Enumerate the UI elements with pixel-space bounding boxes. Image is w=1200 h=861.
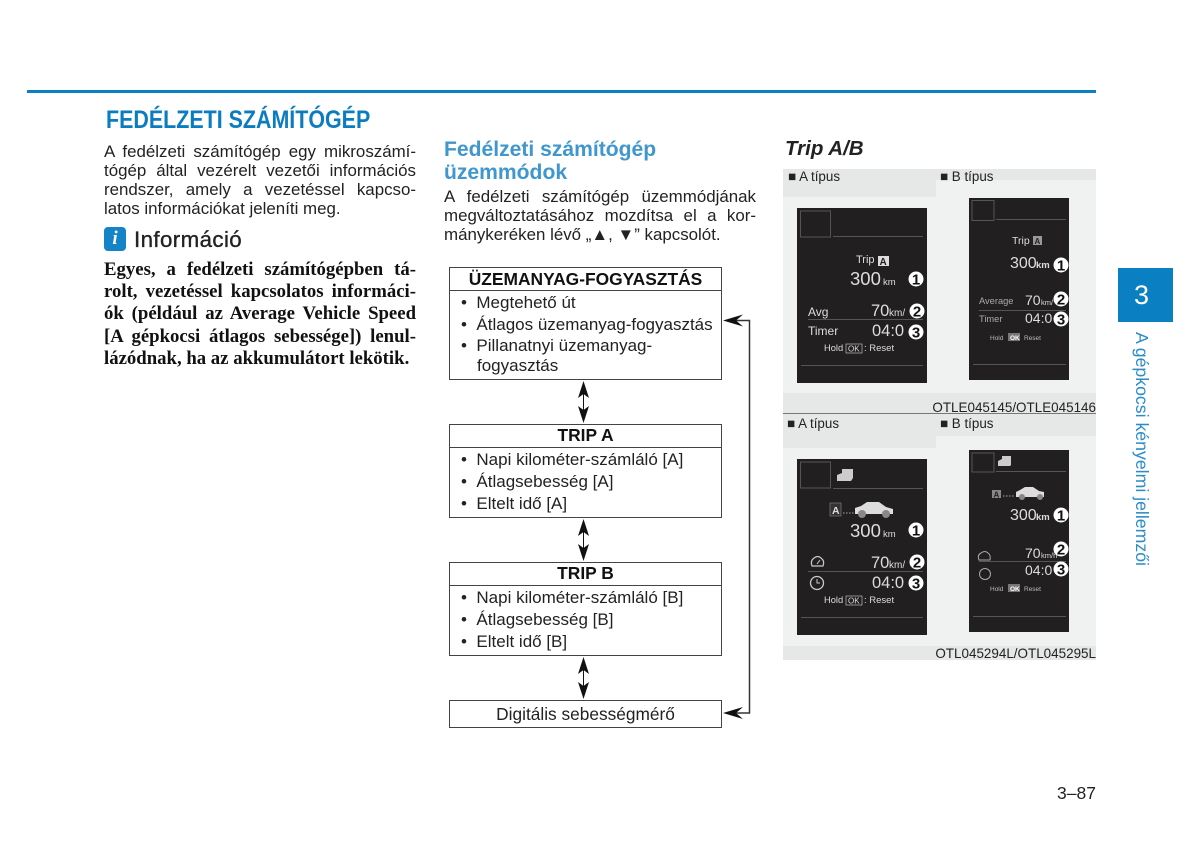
intro text: latos információkat jeleníti meg. — [104, 199, 341, 218]
screen: bottom A: 300 — [850, 520, 881, 541]
screen: bottom A: 3 — [912, 576, 920, 592]
screen: top B: km — [1036, 260, 1050, 271]
modes text — [444, 187, 756, 244]
figure panel top: OTLE045145/OTLE045146 — [932, 400, 1096, 415]
section heading: modes: Fedélzeti számítógép — [444, 138, 656, 161]
chapter tab — [1118, 268, 1173, 322]
screen: top B: Hold — [990, 335, 1004, 342]
box: trip A: TRIP A — [557, 425, 614, 445]
section heading: modes — [444, 138, 656, 184]
title: FEDÉLZETI SZÁMÍTÓGÉP — [106, 106, 370, 134]
icon: info — [104, 227, 126, 251]
screen: bottom A: 70 — [871, 554, 889, 572]
screen: bottom B: Hold — [990, 586, 1004, 593]
figure panel bottom: OTL045294L/OTL045295L — [935, 646, 1097, 661]
box: trip B: TRIP B — [557, 563, 614, 583]
screen: top B: 70 — [1025, 292, 1041, 308]
modes text: megváltoztatásához mozdítsa el a kor- — [444, 206, 756, 225]
figure panel top: ■ A típus — [788, 169, 840, 184]
info text: rolt, vezetéssel kapcsolatos informáci- — [104, 281, 416, 302]
screen: top A: : Reset — [864, 343, 894, 354]
box: fuel consumption — [449, 267, 722, 380]
screen: top A: A — [880, 257, 887, 268]
box: fuel consumption: • Átlagos üzemanyag-fogyasztás — [461, 315, 713, 334]
screen: top A: 3 — [912, 324, 920, 342]
screen: top B: Average — [979, 296, 1013, 306]
box: fuel consumption: • Megtehető út — [461, 293, 576, 312]
figure panel bottom: ■ B típus — [940, 416, 994, 431]
screen: bottom B: 04:0 — [1025, 562, 1052, 578]
box: digital speedometer — [449, 700, 722, 728]
top rule — [27, 90, 1096, 93]
screen: bottom B: 3 — [1057, 562, 1065, 578]
intro text: rendszer, amely a vezetéssel kapcso- — [104, 180, 416, 199]
screen: top B: Timer — [979, 314, 1002, 324]
figure panel top — [783, 169, 1096, 415]
chapter side label: A gépkocsi kényelmi jellemzői — [1132, 332, 1152, 566]
info text: ók (például az Average Vehicle Speed — [104, 303, 416, 324]
box: trip A: • Átlagsebesség [A] — [461, 472, 613, 491]
box: trip A: • Eltelt idő [A] — [461, 494, 567, 513]
box: trip B — [449, 562, 722, 656]
icon: info: i — [112, 228, 118, 249]
box: fuel consumption: • Pillanatnyi üzemanyag- — [461, 336, 652, 355]
screen: top B: km/ — [1041, 298, 1054, 307]
info text: [A gépkocsi átlagos sebessége]) lenul- — [104, 326, 416, 347]
figure panel bottom: ■ A típus — [787, 416, 839, 431]
screen: bottom B: km/h — [1041, 551, 1057, 560]
heading: Trip A/B: Trip A/B — [785, 137, 864, 160]
screen: top A: km/ — [889, 308, 905, 319]
screen: bottom A: Hold — [824, 595, 843, 605]
screen: top A — [797, 208, 927, 383]
arrow: trip A to trip B — [578, 519, 589, 561]
arrow: loop from speedometer to fuel — [723, 314, 750, 719]
intro text — [104, 142, 416, 218]
box: trip A — [449, 424, 722, 518]
intro text: A fedélzeti számítógép egy mikroszámí- — [104, 142, 416, 161]
box: trip B: • Átlagsebesség [B] — [461, 610, 613, 629]
screen: top A: OK — [848, 344, 860, 354]
screen: top A: Timer — [808, 324, 838, 338]
screen: top B: OK — [1010, 335, 1020, 342]
screen: top A: 1 — [912, 272, 920, 288]
info text — [104, 259, 416, 369]
screen: bottom B: A — [994, 490, 1000, 500]
screen: top B: 300 — [1010, 255, 1037, 272]
screen: bottom B: 1 — [1057, 508, 1065, 524]
screen: top A: 04:0 — [872, 322, 904, 340]
screen: top B: 2 — [1057, 292, 1065, 308]
box: fuel consumption: fogyasztás — [477, 356, 558, 375]
figure panel bottom — [783, 414, 1097, 661]
screen: bottom A — [797, 459, 927, 635]
chapter tab: 3 — [1134, 280, 1149, 310]
modes text: A fedélzeti számítógép üzemmódjának — [444, 187, 756, 206]
box: trip B: • Eltelt idő [B] — [461, 632, 567, 651]
intro text: tógép által vezérelt vezetői információs — [104, 161, 416, 180]
screen: top A: km — [883, 277, 896, 288]
screen: top A: Trip — [856, 254, 875, 266]
screen: bottom A: 04:0 — [872, 574, 904, 592]
section heading: modes: üzemmódok — [444, 160, 567, 184]
screen: top A: Avg — [808, 305, 828, 319]
page number: 3–87 — [1057, 783, 1096, 803]
screen: top B: 1 — [1057, 258, 1065, 274]
screen: bottom B: km — [1036, 512, 1050, 523]
screen: bottom B: 2 — [1057, 542, 1065, 558]
screen: bottom A: OK — [848, 596, 860, 606]
screen: bottom B — [969, 450, 1069, 632]
screen: top A: 2 — [913, 304, 921, 320]
screen: top A: 300 — [850, 268, 881, 289]
screen: bottom B: Reset — [1024, 586, 1041, 593]
screen: top B: Trip — [1012, 235, 1030, 247]
arrow: fuel to trip A — [578, 381, 589, 423]
box: digital speedometer: Digitális sebességmérő — [496, 704, 675, 724]
screen: bottom B: 70 — [1025, 545, 1041, 561]
screen: bottom A: km — [883, 529, 896, 540]
screen: bottom B: OK — [1010, 586, 1020, 593]
screen: top B: 3 — [1057, 312, 1065, 328]
info text: Egyes, a fedélzeti számítógépben tá- — [104, 259, 416, 280]
figure panel top: ■ B típus — [940, 169, 994, 184]
screen: bottom A: 2 — [913, 554, 921, 572]
screen: bottom A: A — [832, 505, 840, 517]
info heading: Információ — [134, 227, 242, 252]
screen: top B: A — [1034, 237, 1040, 246]
screen: bottom A: km/ — [889, 560, 905, 571]
screen: top A: 70 — [871, 302, 889, 320]
screen: top B — [969, 198, 1069, 380]
box: trip B: • Napi kilométer-számláló [B] — [461, 588, 683, 607]
screen: top B: Reset — [1024, 335, 1041, 342]
box: trip A: • Napi kilométer-számláló [A] — [461, 450, 683, 469]
screen: bottom A: 1 — [912, 522, 920, 540]
screen: top A: Hold — [824, 343, 843, 353]
info text: lázódnak, ha az akkumulátort lekötik. — [104, 348, 409, 369]
screen: bottom B: 300 — [1010, 507, 1037, 524]
screen: bottom A: : Reset — [864, 595, 894, 606]
screen: top B: 04:0 — [1025, 310, 1052, 326]
box: fuel consumption: ÜZEMANYAG-FOGYASZTÁS — [469, 269, 702, 289]
arrow: trip B to speedometer — [578, 657, 589, 699]
modes text: mánykeréken lévő „▲, ▼” kapcsolót. — [444, 225, 721, 244]
